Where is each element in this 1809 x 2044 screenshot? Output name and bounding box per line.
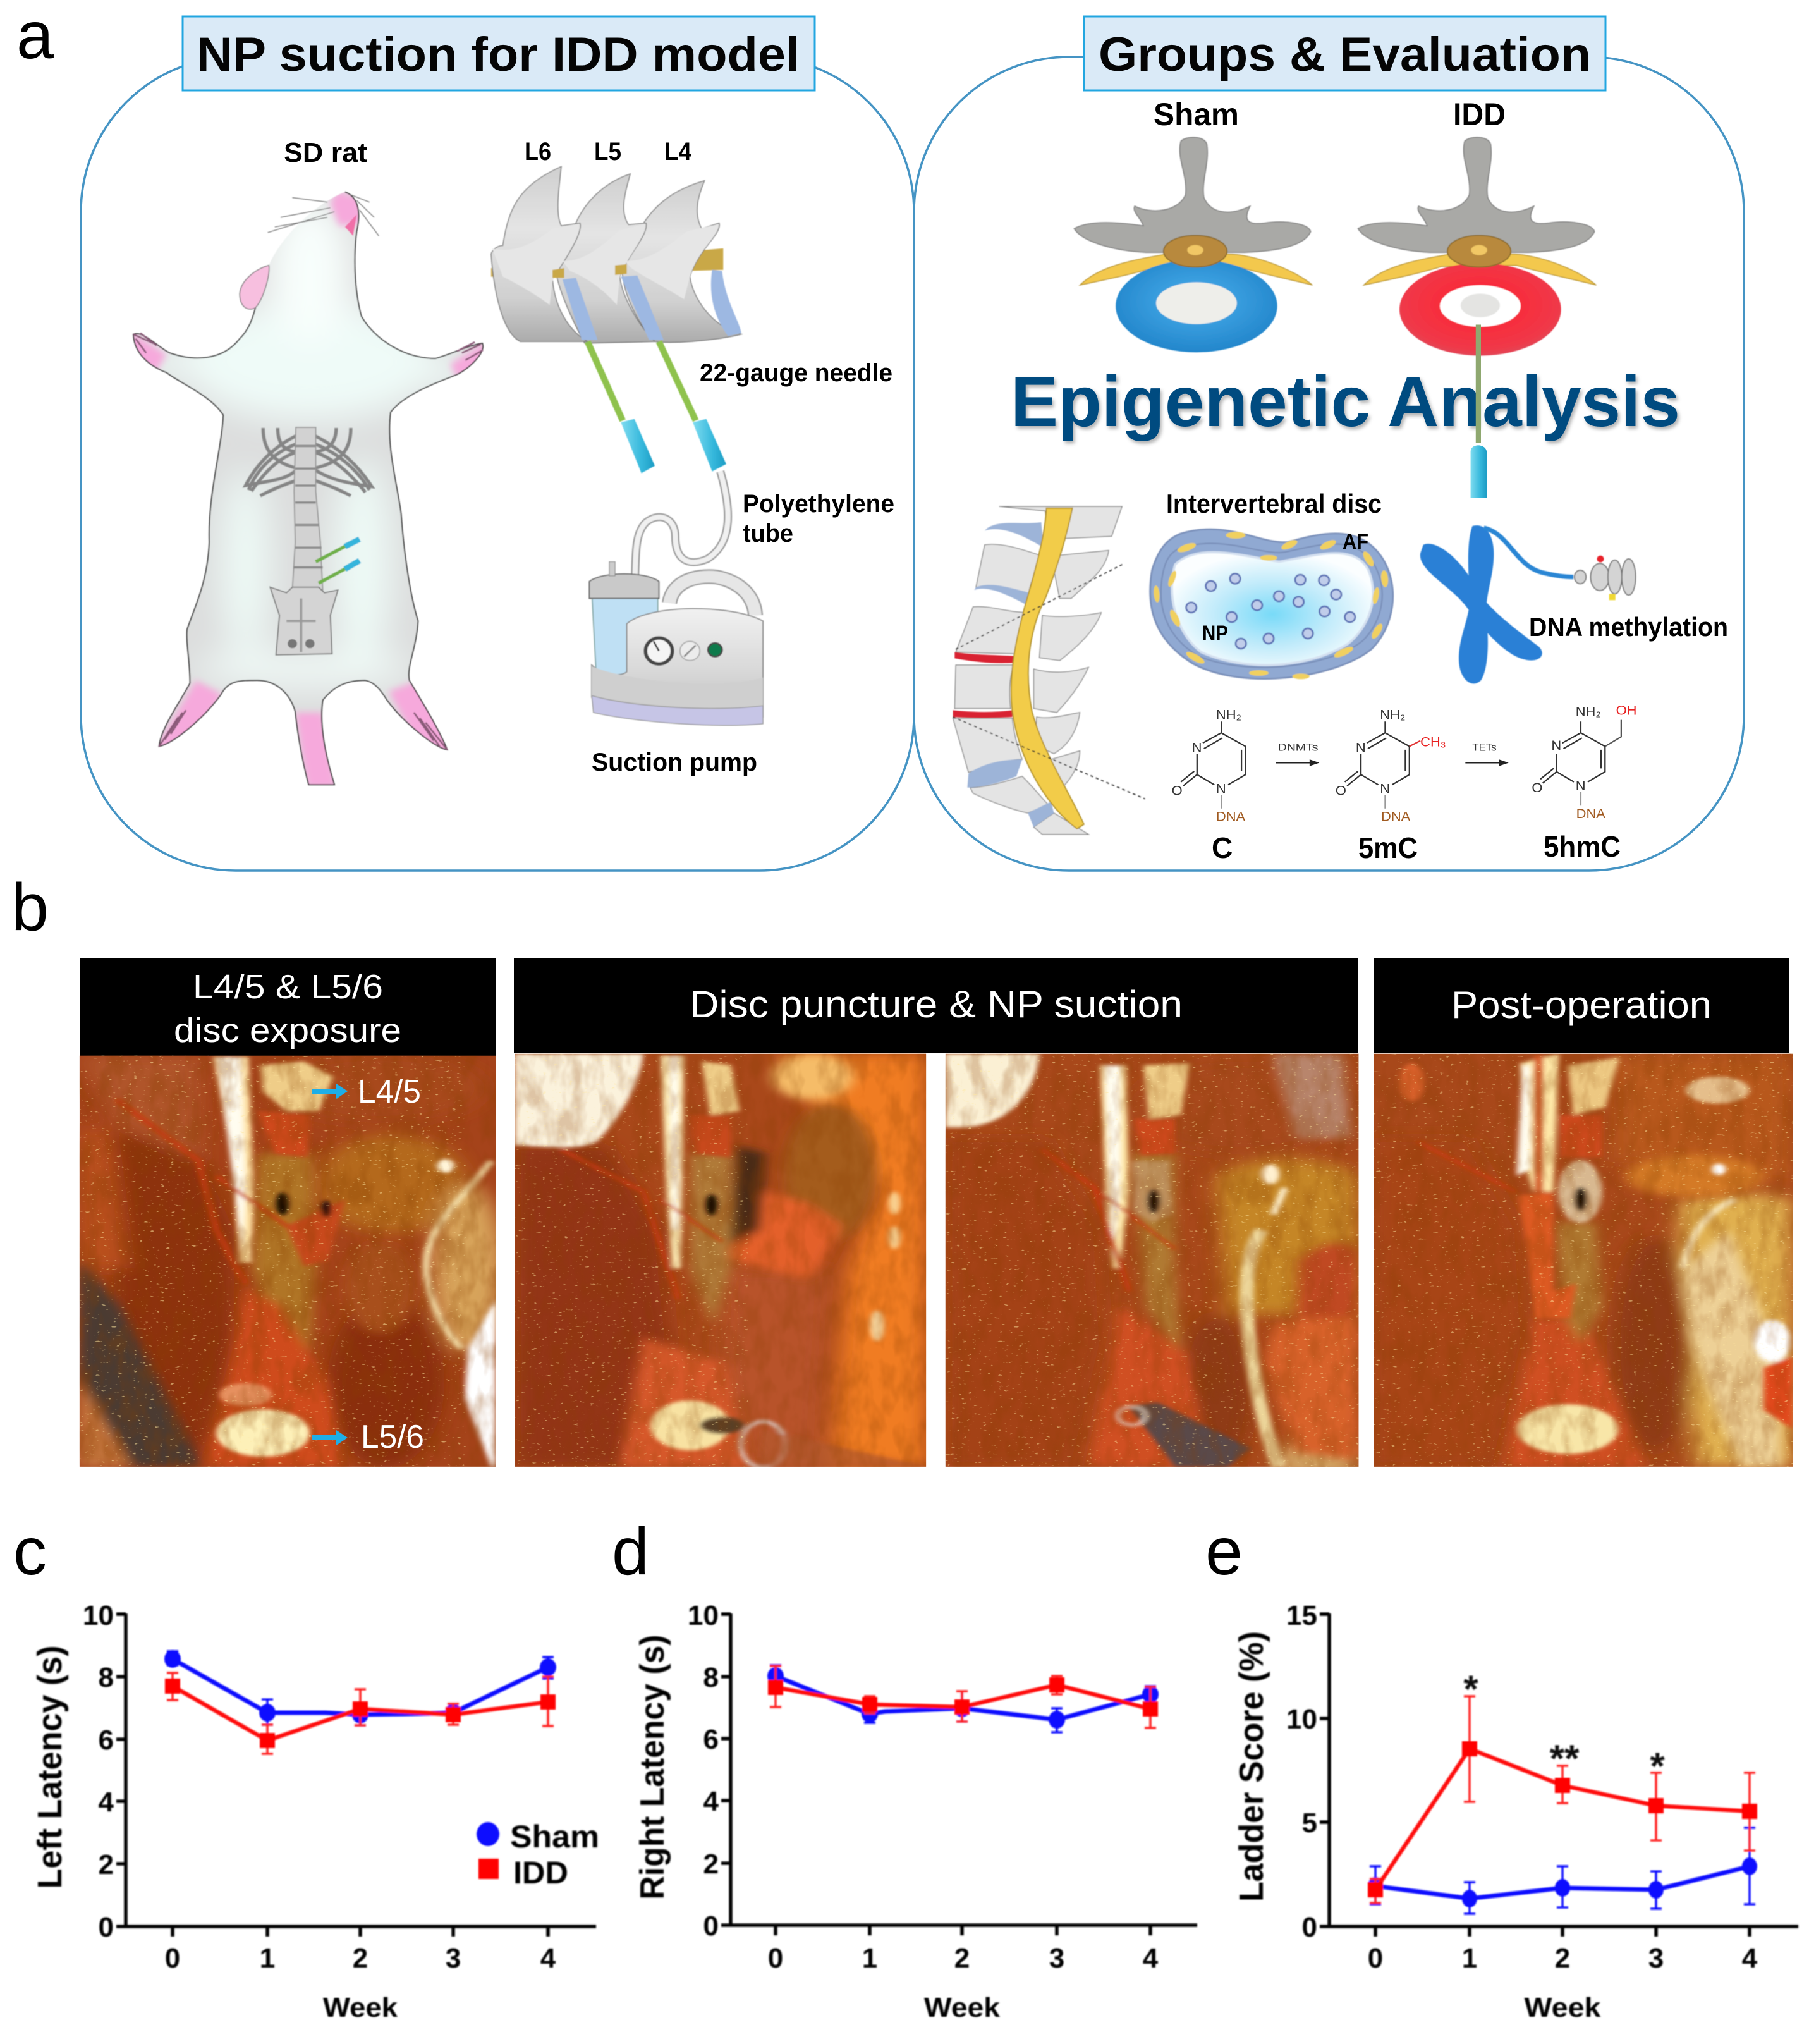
label: C: C [1212,831,1233,864]
structure: 5mC: N [1356,740,1366,755]
y axis title d: Right Latency (s) [633,1635,671,1899]
header: L4/5 and L5/6 disc exposure: disc exposure [174,1012,401,1050]
illustration: lumbar vertebrae with needles [491,166,741,473]
label: NP: NP [1202,621,1228,646]
panel e label: e [1205,1514,1243,1589]
structure: 5hmC: N [1551,737,1561,753]
structure: 5mC: O [1336,783,1346,798]
photo 1: disc exposure [80,1054,503,1467]
x tick labels e: 0 [1368,1943,1383,1974]
structure: 5mC: DNA [1381,809,1411,824]
y tick labels d: 2 [704,1849,719,1880]
significance stars: * [1650,1745,1665,1787]
structure: 5hmC: O [1532,780,1542,795]
vertebral column [292,427,323,590]
x tick labels e: 4 [1742,1943,1758,1974]
ear [240,266,269,309]
chart d: right latency [633,1600,1197,2023]
x tick labels d: 4 [1143,1943,1159,1974]
y tick labels c: 8 [99,1662,114,1693]
processes to the right of the cord [999,506,1122,539]
x tick labels d: 2 [954,1943,970,1974]
level labels [525,138,692,166]
y tick labels c: 10 [83,1600,114,1631]
x tick labels e: 1 [1462,1943,1477,1974]
arrow and label: L4/5: L4/5 [358,1074,421,1110]
series IDD c [165,1673,556,1754]
illustration: sham vertebra with blue disc [1074,137,1312,352]
structure: 5mC: CH₃ [1420,734,1446,749]
y tick labels d: 8 [704,1662,719,1693]
x tick labels e: 2 [1555,1943,1570,1974]
legend c [477,1819,599,1890]
header: post-operation [1374,958,1789,1053]
panel d label: d [612,1514,649,1589]
photo 4: post-operation [1374,1054,1793,1467]
level labels: L6 [525,138,551,166]
series Sham e [1368,1828,1757,1914]
x axis title c: Week [323,1992,398,2023]
title box left [183,16,815,90]
x tick labels c: 1 [260,1943,275,1974]
structure: C: O [1172,783,1183,798]
panel c label: c [13,1514,47,1589]
series Sham c [164,1650,556,1725]
illustration: suction pump and tube [589,472,763,725]
illustration: IDD vertebra with red disc [1358,137,1596,356]
structure: 5mC: N [1380,781,1390,797]
x tick labels d: 0 [768,1943,783,1974]
y tick labels c [83,1600,114,1943]
level labels: L4 [664,138,692,166]
arrow: DNMTs [1276,741,1319,766]
y tick labels d: 6 [704,1724,719,1755]
structure: C: N [1192,740,1202,755]
arrow and label: L4/5 [312,1074,421,1110]
structure: 5hmC: OH [1616,702,1636,718]
y tick labels c: 0 [99,1912,114,1943]
axes c [116,1613,596,1937]
x tick labels e: 3 [1648,1943,1664,1974]
label: polyethylene tube: Polyethylene [743,490,894,518]
y tick labels d [688,1600,719,1942]
title box left: NP suction for IDD model [197,28,800,82]
y tick labels e [1286,1600,1317,1943]
panel b label: b [11,870,49,945]
label: Sham: Sham [1154,97,1239,132]
pink extremities [129,191,491,788]
mini needles [316,545,348,583]
x tick labels e [1368,1943,1758,1974]
legend c: IDD [513,1855,568,1890]
x tick labels d [768,1943,1159,1974]
axes d [721,1613,1197,1935]
y axis title c: Left Latency (s) [31,1645,69,1889]
structure: C: DNA [1216,809,1246,824]
illustration: intervertebral disc cross-section [1150,529,1393,679]
label: polyethylene tube: tube [743,520,793,548]
chart e: ladder score [1233,1600,1798,2023]
panel b: surgical photographs [80,958,1793,1483]
x axis title d: Week [924,1992,1001,2023]
structure: 5hmC [1532,702,1636,821]
rib cage [245,428,372,496]
panel a label: a [16,0,54,73]
significance stars: ** [1550,1737,1580,1780]
toes and fingers [133,333,483,750]
structure: C [1172,707,1246,824]
articular wings [492,224,718,305]
arrow and label: L5/6: L5/6 [361,1419,424,1455]
illustration: chromosome and DNA [1420,525,1636,683]
arrow: TETs: TETs [1472,741,1497,754]
illustration: lumbar spine side view [953,506,1145,835]
title box right [1084,16,1605,90]
header: post-operation: Post-operation [1451,984,1712,1026]
y tick labels c: 2 [99,1849,114,1880]
label: DNA methylation: DNA methylation [1529,612,1728,642]
structure: C: NH₂ [1216,707,1241,723]
photo 3: suction [946,1054,1358,1483]
y tick labels e: 15 [1286,1600,1317,1631]
legend c: Sham [510,1819,599,1854]
y tick labels e: 5 [1302,1808,1317,1839]
chart c: left latency [31,1600,599,2023]
illustration: SD rat with exposed skeleton [131,191,484,786]
structure: C: N [1216,781,1226,797]
vertebral bodies [976,544,1042,601]
y tick labels d: 4 [704,1786,719,1817]
whiskers [268,195,379,236]
structure: 5mC: NH₂ [1380,707,1405,723]
photo 2: puncture [515,1054,926,1467]
x tick labels d: 1 [862,1943,877,1974]
right panel frame [914,57,1744,871]
panel a: NP suction for IDD model [81,16,914,871]
label: IDD: IDD [1453,97,1506,132]
series IDD e [1368,1696,1757,1903]
label: suction pump: Suction pump [592,749,757,776]
heading: SD rat: SD rat [284,137,367,168]
structure: 5hmC: N [1576,778,1586,793]
heading: Epigenetic Analysis: Epigenetic Analysis [1011,362,1680,441]
header: L4/5 and L5/6 disc exposure: L4/5 & L5/6 [193,968,383,1006]
structure: 5hmC: NH₂ [1576,704,1601,719]
pelvis [270,587,338,655]
axes e [1320,1613,1798,1937]
x tick labels c [165,1943,556,1974]
arrow: DNMTs: DNMTs [1278,741,1319,754]
panel a right: groups and evaluation [914,16,1744,871]
series IDD d [768,1666,1158,1728]
significance stars [1463,1668,1665,1787]
y tick labels d: 0 [704,1911,719,1942]
x tick labels c: 2 [353,1943,368,1974]
x tick labels c: 4 [540,1943,556,1974]
y axis title e: Ladder Score (%) [1233,1631,1270,1902]
x tick labels d: 3 [1049,1943,1064,1974]
series Sham d [767,1665,1159,1732]
structure: 5hmC: DNA [1576,805,1605,821]
arrow: TETs [1465,741,1509,766]
header: L4/5 and L5/6 disc exposure [80,958,496,1056]
arrow and label: L5/6 [312,1419,424,1455]
title box right: Groups & Evaluation [1099,28,1591,82]
y tick labels c: 6 [99,1725,114,1756]
label: polyethylene tube [743,490,894,548]
header: disc puncture and NP suction [514,958,1358,1053]
label: Intervertebral disc: Intervertebral disc [1166,489,1382,518]
y tick labels c: 4 [99,1787,114,1818]
significance stars: * [1463,1668,1478,1710]
y tick labels e: 10 [1286,1704,1317,1735]
y tick labels d: 10 [688,1600,719,1631]
y tick labels e: 0 [1302,1912,1317,1943]
label: 22-gauge needle: 22-gauge needle [700,359,892,387]
label: AF: AF [1343,530,1368,554]
label: 5mC: 5mC [1358,831,1418,864]
level labels: L5 [594,138,621,166]
x tick labels c: 3 [446,1943,461,1974]
structure: 5mC [1336,707,1446,824]
illustration: suction needle over disc [1471,324,1487,498]
x tick labels c: 0 [165,1943,180,1974]
label: 5hmC: 5hmC [1544,830,1621,863]
header: disc puncture and NP suction: Disc puncture & NP suction [690,983,1183,1025]
chemistry: cytosine to 5mC to 5hmC [1172,702,1636,824]
left panel frame [81,57,914,871]
x axis title e: Week [1525,1992,1601,2023]
